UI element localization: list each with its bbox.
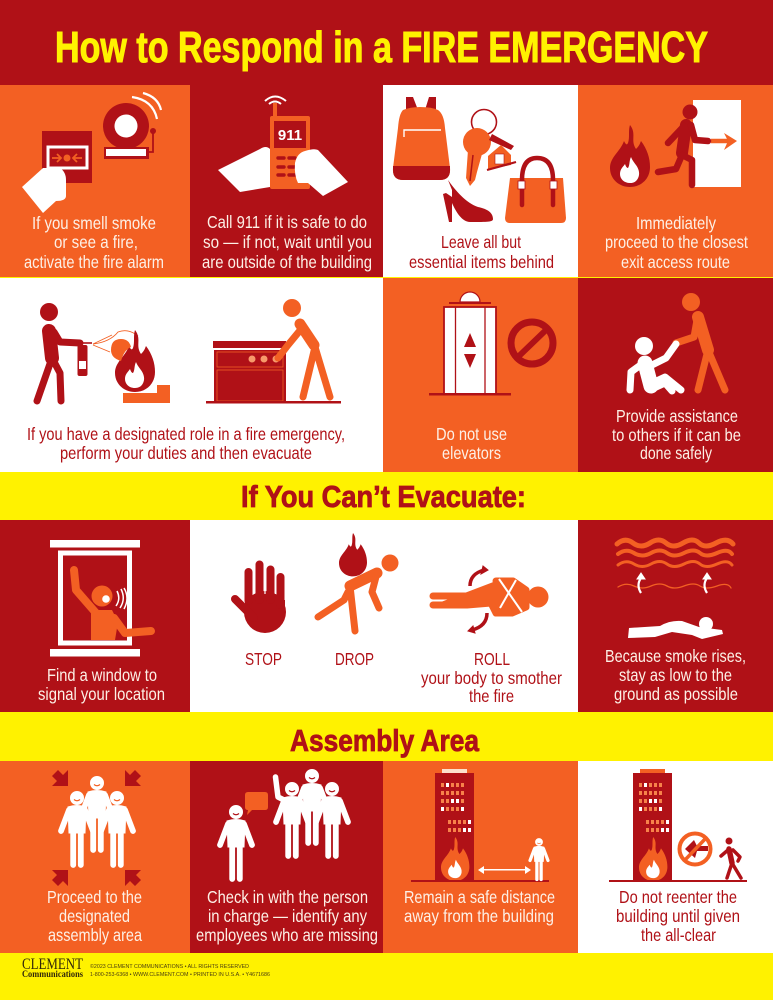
- caption: to others if it can be: [612, 425, 741, 445]
- caption: Provide assistance: [616, 406, 738, 426]
- caption: elevators: [442, 443, 501, 463]
- heading: assembly area: Assembly Area: [290, 723, 480, 758]
- icon: prohibited sign: [511, 322, 553, 364]
- caption: roll: [421, 649, 562, 706]
- copyright text: [90, 963, 270, 978]
- caption: essential items behind: [409, 252, 554, 272]
- panel: stay low: [578, 520, 773, 712]
- icon: flame: [610, 125, 650, 187]
- caption: [404, 887, 555, 926]
- caption: [24, 213, 164, 272]
- caption: stay as low to the: [619, 665, 732, 685]
- caption: [202, 212, 372, 272]
- caption: done safely: [640, 443, 712, 463]
- caption: the all-clear: [641, 925, 716, 945]
- caption: [612, 406, 741, 463]
- caption: Check in with the person: [207, 887, 368, 907]
- caption: If you have a designated role in a fire emergency,: [27, 424, 345, 444]
- icon: phone held in hands: 911: [278, 127, 302, 144]
- caption: activate the fire alarm: [24, 252, 164, 272]
- panel: check in: [190, 761, 383, 953]
- caption: exit access route: [621, 252, 730, 272]
- panel: activate the fire alarm: [0, 85, 190, 277]
- caption: [47, 887, 142, 945]
- caption: [38, 665, 165, 704]
- caption: Find a window to: [47, 665, 157, 685]
- panel: designated role: [0, 278, 383, 472]
- icon: handbag: [505, 158, 566, 223]
- panel: call 911: [190, 85, 383, 277]
- caption: Proceed to the: [47, 887, 142, 907]
- icon: burning building: [609, 769, 747, 882]
- panel: signal at window: [0, 520, 190, 712]
- caption: If you smell smoke: [32, 213, 156, 233]
- caption: Leave all but: [441, 232, 521, 252]
- caption: building until given: [616, 906, 740, 926]
- icon: person at safe distance: [530, 838, 548, 880]
- caption: [27, 424, 345, 463]
- caption: perform your duties and then evacuate: [60, 443, 312, 463]
- caption: Immediately: [636, 213, 716, 233]
- icon: drop figure with flame: [318, 533, 398, 631]
- icon: person signalling at window: [50, 540, 151, 656]
- icon: group of people: [61, 776, 133, 865]
- icon: elevator: [429, 292, 511, 396]
- caption: [436, 424, 507, 463]
- caption: roll: the fire: [469, 686, 514, 706]
- icon: fire alarm pull station and bell: [22, 93, 161, 213]
- caption: Do not reenter the: [619, 887, 737, 907]
- caption: away from the building: [404, 906, 554, 926]
- label: stop: STOP: [245, 649, 282, 669]
- caption: ground as possible: [614, 684, 738, 704]
- caption: or see a fire,: [54, 232, 138, 252]
- icon: person walking away: [721, 838, 741, 878]
- label: drop: DROP: [335, 649, 374, 669]
- caption: [196, 887, 378, 945]
- panel: safe distance: [383, 761, 578, 953]
- icon: keys: [463, 110, 516, 186]
- panel: proceed to exit: [578, 85, 773, 277]
- panel: do not reenter: [578, 761, 773, 953]
- panel: leave items behind: [383, 85, 578, 277]
- icon: person turning off stove: [206, 299, 341, 404]
- logo: [22, 956, 83, 980]
- icon: high heel shoe: [443, 180, 493, 222]
- logo: CLEMENT: [22, 956, 83, 973]
- heading: if you can't evacuate: If You Can’t Evacuate:: [241, 479, 526, 514]
- caption: proceed to the closest: [605, 232, 748, 252]
- caption: assembly area: [48, 925, 142, 945]
- caption: employees who are missing: [196, 925, 378, 945]
- panel: do not use elevators: [383, 278, 578, 472]
- icon: distance arrow: [478, 866, 531, 874]
- caption: roll: your body to smother: [421, 668, 562, 688]
- caption: Remain a safe distance: [404, 887, 555, 907]
- footer: [0, 953, 773, 1000]
- icon: backpack: [393, 97, 450, 180]
- icon: person helping fallen person: [630, 293, 725, 391]
- title banner: [0, 0, 773, 85]
- caption: roll: ROLL: [474, 649, 510, 669]
- icon: burning building: [411, 769, 549, 882]
- caption: [616, 887, 740, 945]
- caption: [605, 646, 746, 704]
- icon: person in charge with speech bubble: [220, 792, 268, 879]
- caption: Do not use: [436, 424, 507, 444]
- icon: person running to exit door: [658, 100, 741, 187]
- caption: designated: [59, 906, 130, 926]
- icon: rising smoke waves: [617, 540, 733, 588]
- logo: Communications: [22, 970, 83, 980]
- copyright text: ©2023 CLEMENT COMMUNICATIONS • ALL RIGHTS RESERVED: [90, 963, 249, 970]
- caption: Because smoke rises,: [605, 646, 746, 666]
- caption: in charge — identify any: [208, 906, 367, 926]
- caption: are outside of the building: [202, 252, 372, 272]
- caption: so — if not, wait until you: [203, 232, 372, 252]
- caption: [605, 213, 748, 272]
- icon: four converging arrows: [52, 770, 141, 886]
- copyright text: 1-800-253-6368 • WWW.CLEMENT.COM • PRINTED IN U.S.A. • Y4671686: [90, 972, 270, 978]
- icon: smoke arrows: [637, 573, 711, 593]
- icon: person crawling low: [628, 617, 723, 639]
- icon: no entry sign: [680, 834, 710, 864]
- caption: signal your location: [38, 684, 165, 704]
- panel: stop drop roll: [190, 520, 578, 712]
- icon: stop hand: [235, 564, 286, 633]
- icon: person using extinguisher on fire: [37, 303, 170, 403]
- icon: phone held in hands: [218, 96, 348, 196]
- caption: Call 911 if it is safe to do: [207, 212, 367, 232]
- caption: [409, 232, 554, 272]
- panel: provide assistance: [578, 278, 773, 472]
- icon: rolling figure: [433, 566, 548, 633]
- panel: proceed to assembly area: [0, 761, 190, 953]
- icon: group with raised hand: [276, 770, 348, 856]
